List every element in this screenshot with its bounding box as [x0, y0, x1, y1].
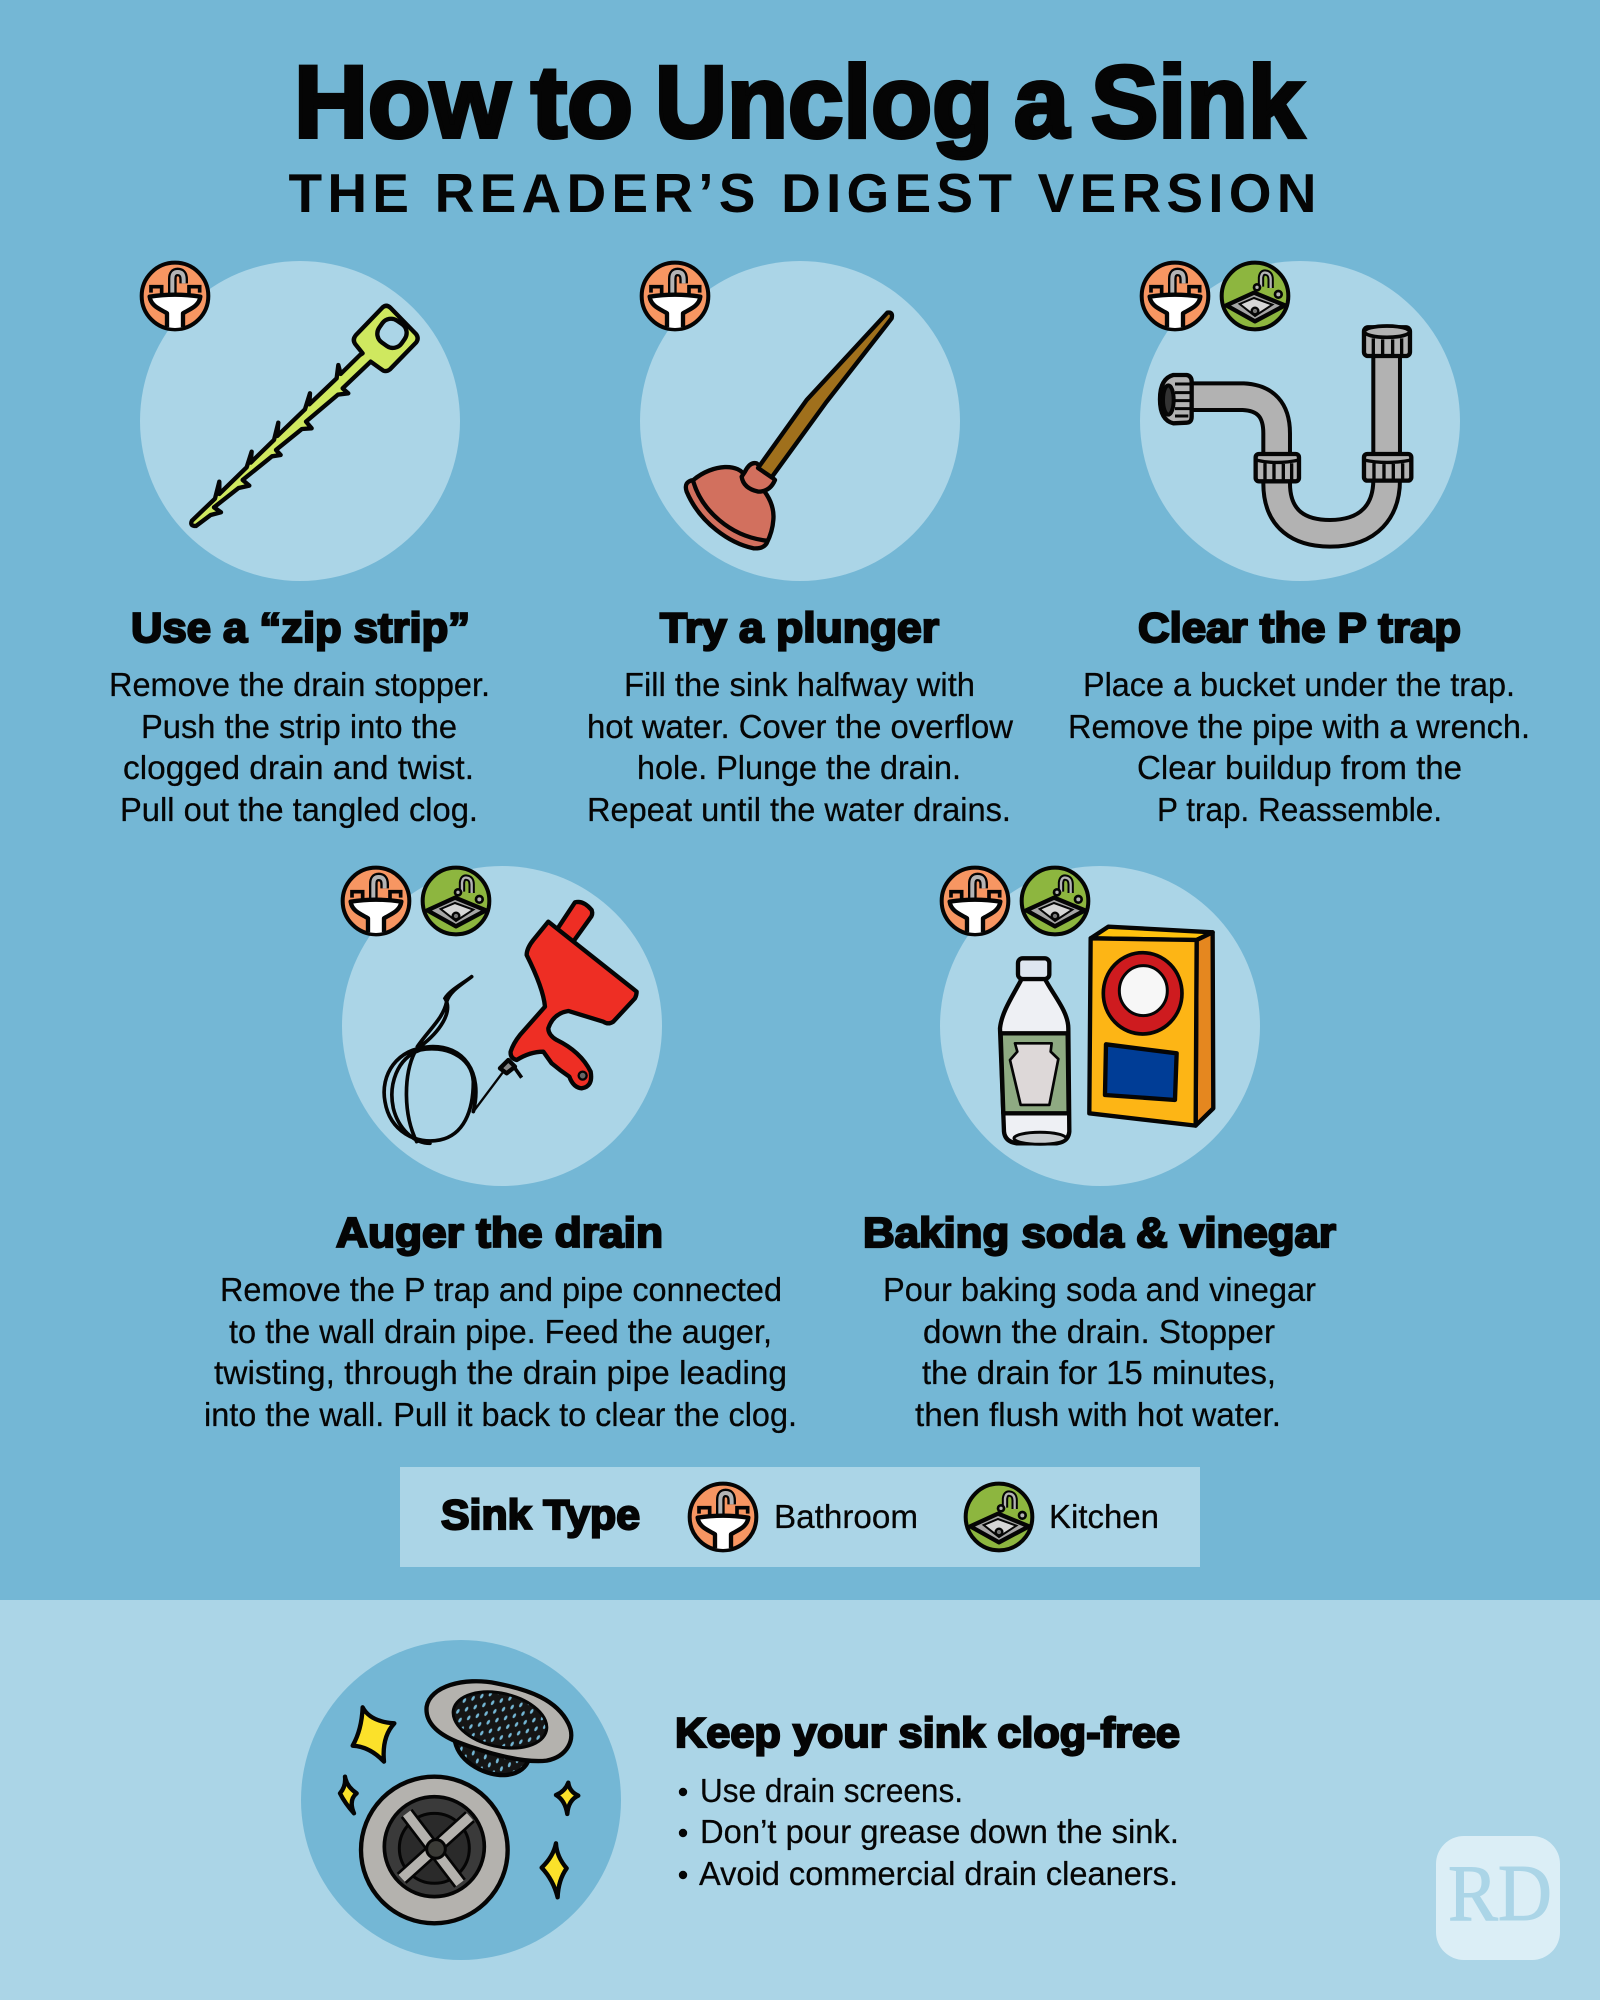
icon: vinegar bottle and baking soda box — [1000, 927, 1213, 1144]
text block: zip strip steps: Remove the drain stopper. — [109, 666, 490, 703]
text block: baking soda steps — [883, 1271, 1316, 1433]
legend heading: Sink Type — [441, 1491, 640, 1538]
icon: p trap pipe — [1160, 326, 1411, 533]
logo: RD: RD — [1448, 1850, 1552, 1938]
heading: baking soda and vinegar: Baking soda & vinegar — [863, 1209, 1336, 1256]
illustration circle — [301, 1640, 621, 1960]
legend label: bathroom: Bathroom — [774, 1498, 918, 1535]
panel: plunger — [587, 261, 1013, 828]
text block: baking soda steps: the drain for 15 minutes, — [922, 1354, 1276, 1391]
icon: plunger — [686, 313, 892, 548]
illustration circle — [940, 866, 1260, 1186]
text block: auger steps — [204, 1271, 797, 1433]
icon: bathroom sink — [690, 1484, 756, 1554]
panel: p trap — [1068, 261, 1530, 828]
icon: kitchen sink badge — [423, 868, 489, 934]
text block: p trap steps: P trap. Reassemble. — [1157, 791, 1442, 828]
text block: plunger steps: hot water. Cover the overflow — [587, 708, 1013, 745]
illustration circle — [640, 261, 960, 581]
legend: sink type — [400, 1467, 1200, 1567]
heading: auger the drain: Auger the drain — [336, 1209, 663, 1256]
logo: RD — [1436, 1836, 1560, 1960]
subtitle: THE READER’S DIGEST VERSION — [288, 162, 1316, 224]
icon: kitchen sink badge — [1222, 263, 1288, 329]
illustration circle — [1140, 261, 1460, 581]
text block: p trap steps — [1068, 666, 1530, 828]
panel: zip strip — [109, 261, 490, 828]
icon: drain strainer, drain and sparkles — [340, 1681, 578, 1923]
text block: auger steps: to the wall drain pipe. Feed the auger, — [229, 1313, 772, 1350]
illustration circle — [140, 261, 460, 581]
text block: plunger steps: Fill the sink halfway with — [624, 666, 975, 703]
heading: clear the p trap: Clear the P trap — [1138, 604, 1461, 651]
text block: auger steps: into the wall. Pull it back to clear the clog. — [204, 1396, 797, 1433]
title: Sink — [1091, 45, 1304, 159]
text block: prevention tips — [679, 1772, 1179, 1892]
text block: baking soda steps: Pour baking soda and vinegar — [883, 1271, 1316, 1308]
panel: auger — [204, 866, 797, 1433]
text block: zip strip steps: Pull out the tangled clog. — [120, 791, 478, 828]
icon: kitchen sink — [966, 1484, 1032, 1550]
footer band — [0, 1600, 1600, 2000]
text block: plunger steps — [587, 666, 1013, 828]
icon: bathroom sink badge — [942, 868, 1008, 938]
heading: try a plunger: Try a plunger — [660, 604, 939, 651]
title: Unclog — [655, 45, 993, 159]
text block: zip strip steps — [109, 666, 490, 828]
title: to — [531, 45, 633, 159]
icon: bathroom sink badge — [142, 263, 208, 333]
title: a — [1014, 45, 1070, 159]
legend label: kitchen: Kitchen — [1049, 1498, 1159, 1535]
text block: zip strip steps: clogged drain and twist. — [123, 749, 474, 786]
icon: bathroom sink badge — [642, 263, 708, 333]
panel: baking soda and vinegar — [863, 866, 1336, 1433]
title: How — [294, 45, 511, 159]
icon: kitchen sink badge — [1022, 868, 1088, 934]
icon: zip strip tool — [191, 306, 418, 526]
illustration circle — [342, 866, 662, 1186]
panel: keep your sink clog-free — [0, 1600, 1600, 2000]
legend panel — [400, 1467, 1200, 1567]
text block: baking soda steps: then flush with hot water. — [915, 1396, 1281, 1433]
text block: p trap steps: Clear buildup from the — [1137, 749, 1462, 786]
icon: bathroom sink badge — [1142, 263, 1208, 333]
text block: auger steps: twisting, through the drain pipe leading — [214, 1354, 787, 1391]
text block: plunger steps: hole. Plunge the drain. — [637, 749, 961, 786]
text block: p trap steps: Place a bucket under the trap. — [1083, 666, 1515, 703]
text block: prevention tips: Don’t pour grease down the sink. — [700, 1813, 1179, 1850]
text block: prevention tips: Avoid commercial drain cleaners. — [699, 1855, 1178, 1892]
text block: plunger steps: Repeat until the water drains. — [587, 791, 1011, 828]
heading: keep your sink clog-free: Keep your sink clog-free — [675, 1709, 1180, 1756]
text block: baking soda steps: down the drain. Stopper — [923, 1313, 1275, 1350]
icon: drain auger — [384, 902, 637, 1143]
icon: bathroom sink badge — [343, 868, 409, 938]
text block: zip strip steps: Push the strip into the — [141, 708, 457, 745]
text block: p trap steps: Remove the pipe with a wrench. — [1068, 708, 1530, 745]
heading: use a zip strip: Use a “zip strip” — [131, 604, 470, 651]
text block: prevention tips: Use drain screens. — [700, 1772, 963, 1809]
text block: auger steps: Remove the P trap and pipe connected — [220, 1271, 782, 1308]
